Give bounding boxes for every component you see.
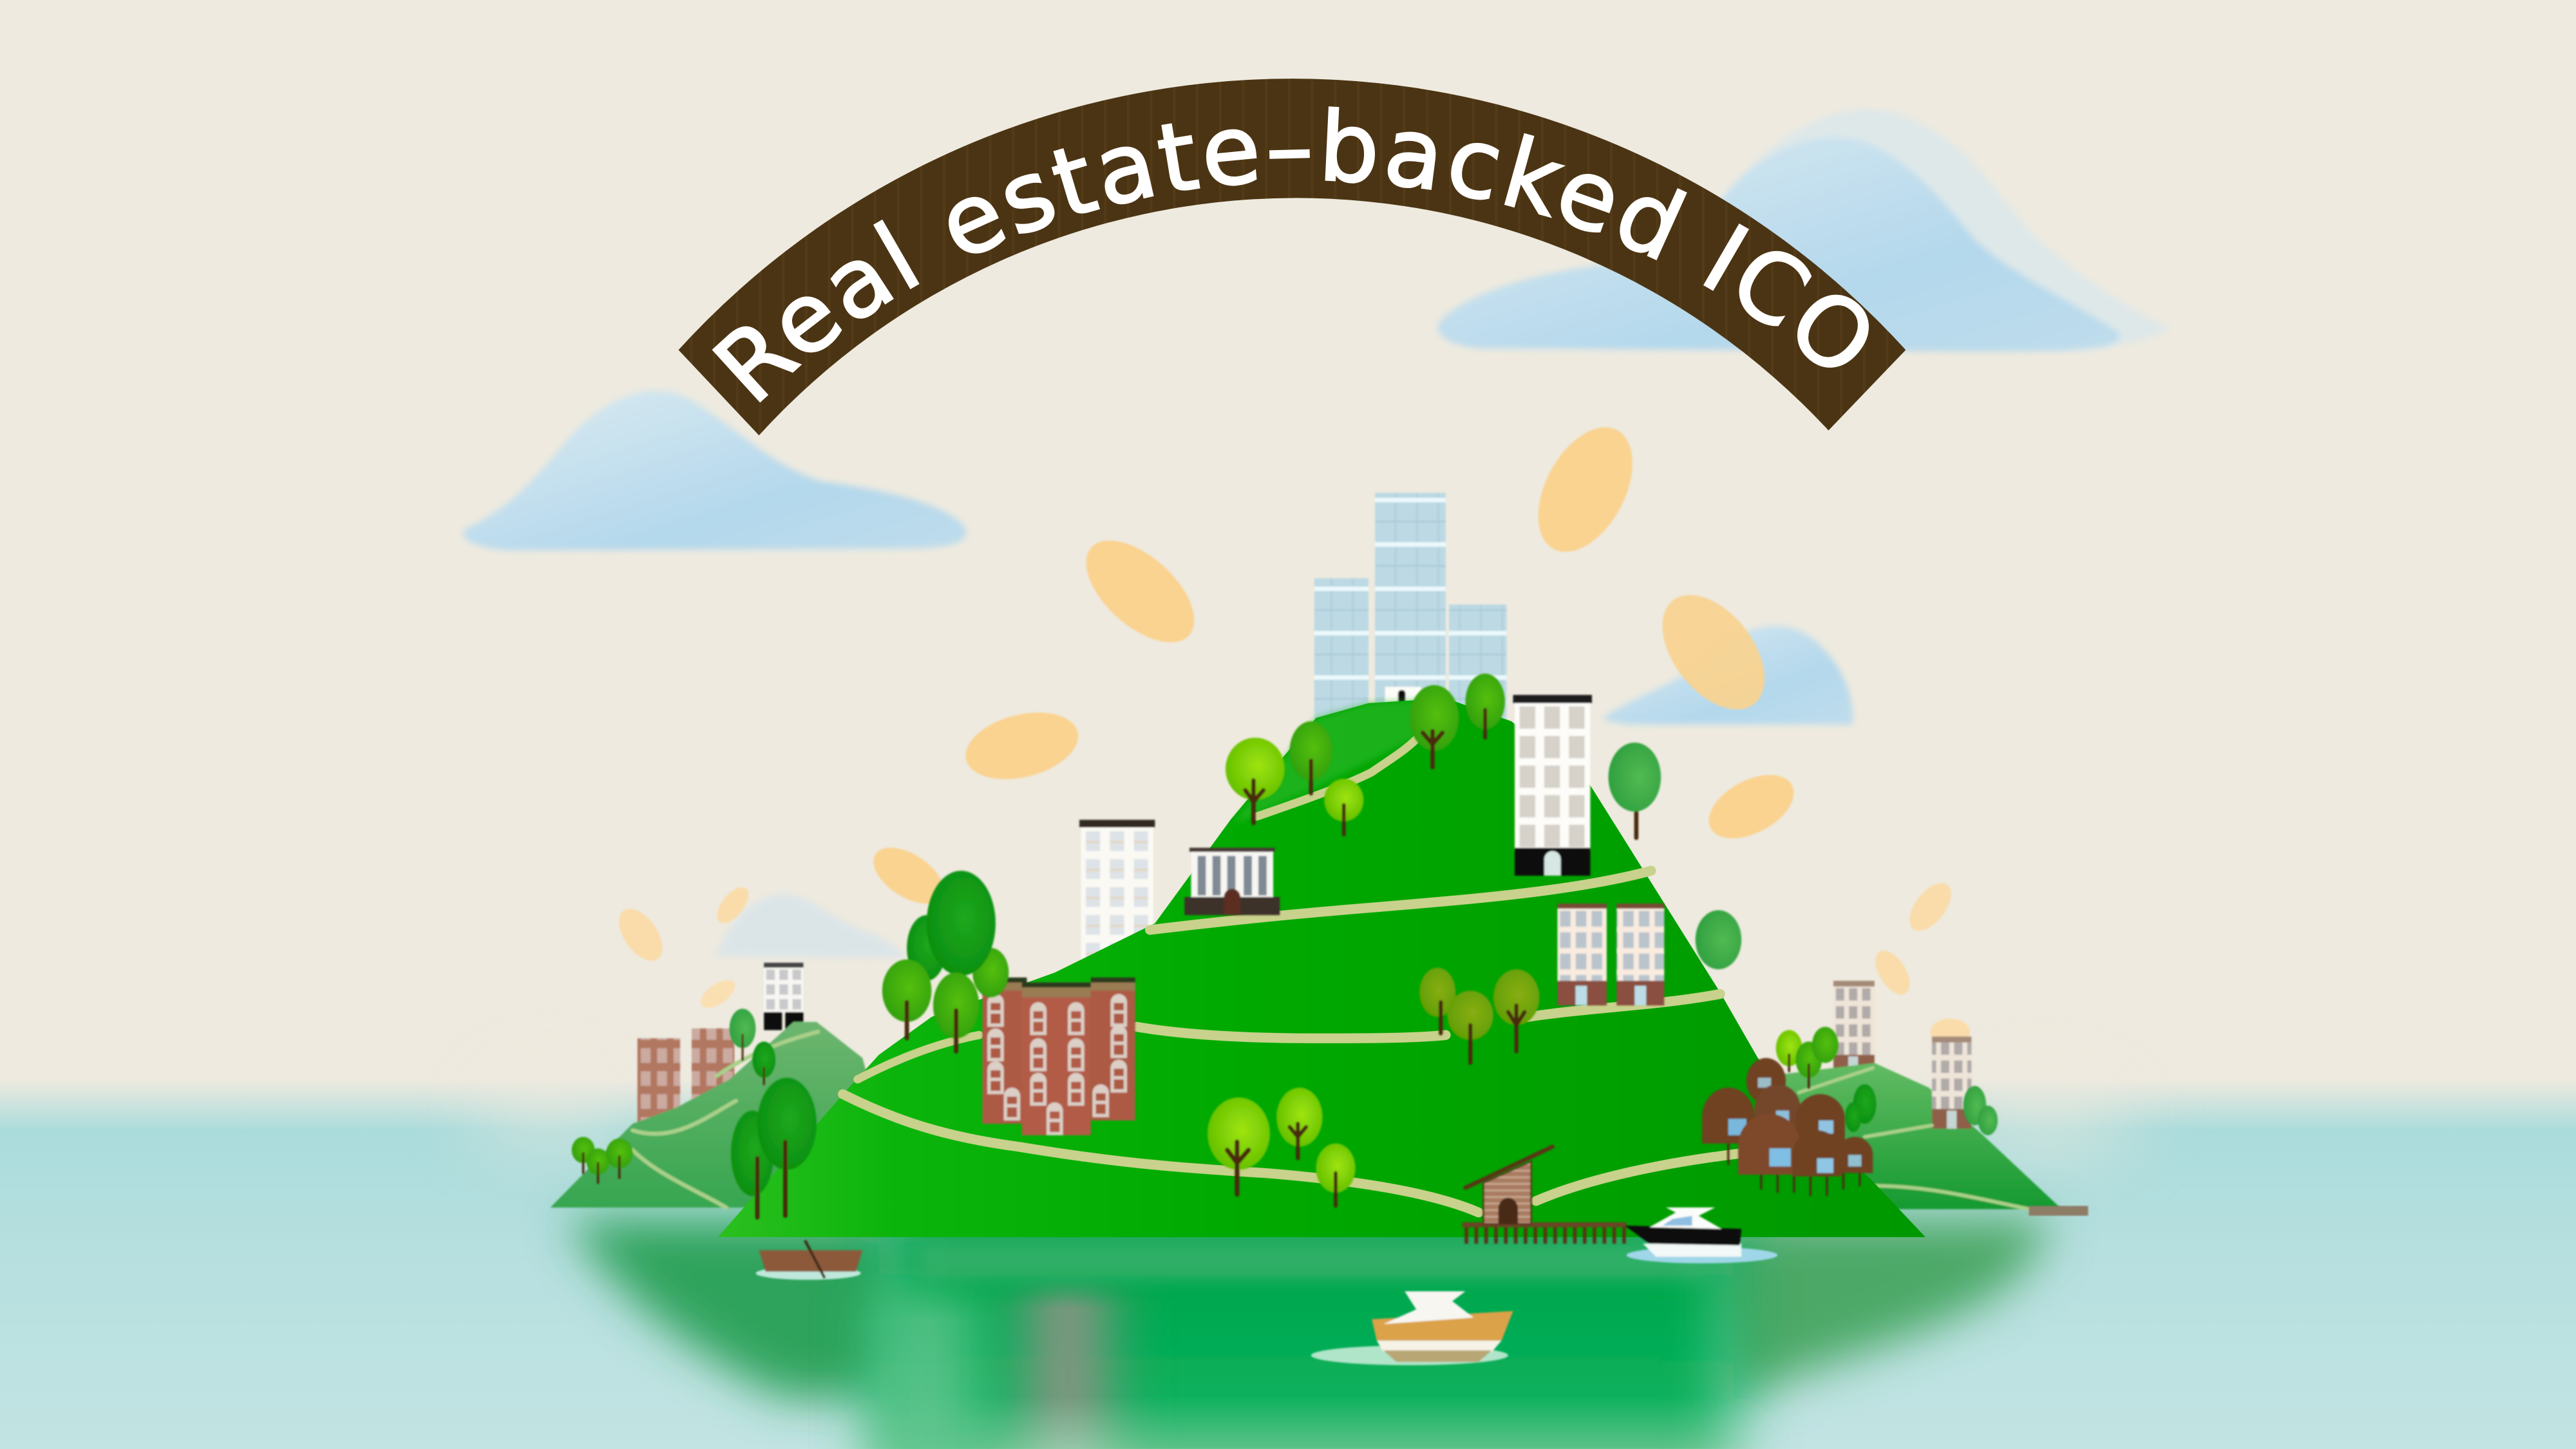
path: bottom right (1536, 1153, 1741, 1201)
clouds (463, 109, 2172, 958)
coin (696, 974, 740, 1013)
tower: right (1449, 605, 1506, 719)
trees: bright lower group (1208, 1088, 1356, 1206)
left small hill (551, 963, 887, 1208)
small dock right (2029, 1206, 2088, 1216)
right building tall (1833, 981, 1875, 1074)
title text: Real estate–backed ICO (712, 106, 1869, 403)
summit lighter area (1232, 698, 1446, 825)
trees: right small hill (1776, 1027, 1998, 1135)
main island (718, 698, 1926, 1237)
cloud: top right (1437, 137, 2119, 352)
brick cornice (983, 978, 1135, 997)
glass towers on the summit (1314, 493, 1506, 734)
hut (1747, 1058, 1786, 1104)
brick windows (987, 994, 1127, 1135)
coin (611, 901, 671, 969)
hut piles (1728, 1142, 1860, 1196)
hill paths (1799, 1068, 2045, 1213)
pier piles (1462, 1224, 1627, 1244)
hill shape (551, 1022, 887, 1208)
trees: olive group (1419, 968, 1539, 1063)
cloud: left (463, 391, 966, 551)
reflection: light streak (879, 1265, 974, 1449)
coin (1902, 876, 1959, 938)
reflection: left lobe (567, 1219, 895, 1399)
coin (1642, 576, 1785, 728)
left white tower (1079, 820, 1155, 969)
colonnade building (1184, 848, 1280, 915)
reflection: brick building (1028, 1273, 1107, 1449)
tower: centre (1375, 493, 1446, 710)
trees: right edge (1608, 743, 1741, 969)
coins (611, 412, 1970, 1045)
banner ribbon (679, 79, 1906, 435)
haze: around island at the horizon (468, 1065, 2136, 1157)
brick wing: centre (1022, 990, 1091, 1135)
hut (1792, 1130, 1842, 1177)
reflection of the island in the water (567, 1219, 2050, 1449)
hut (1738, 1114, 1801, 1175)
coin (1868, 945, 1917, 1000)
mountain paths (843, 739, 1741, 1213)
path: third (1137, 994, 1720, 1038)
boat: motorboat (1311, 1291, 1513, 1365)
small brick building 2 (692, 1028, 734, 1104)
boathouse roof (1466, 1147, 1553, 1188)
brick building (983, 978, 1135, 1135)
haze: left (468, 1065, 632, 1144)
brick wing: left (983, 983, 1027, 1124)
trees on small left hill (572, 1009, 775, 1183)
right building short (1932, 1037, 1971, 1129)
banner: arched title (679, 79, 1906, 435)
path: top (1257, 739, 1416, 817)
reflection: water band below the shore (920, 1240, 1709, 1280)
trees (572, 674, 1998, 1217)
coin (1068, 522, 1212, 661)
white tower building (1513, 695, 1592, 876)
coin (958, 702, 1085, 790)
coin (711, 882, 754, 929)
boathouse (1484, 1162, 1531, 1224)
tree cluster: left of brick building (882, 871, 1009, 1052)
hill paths (632, 1032, 818, 1208)
path: bottom (843, 1094, 1479, 1213)
hill shape (1766, 1063, 2062, 1209)
small brick building (638, 1038, 680, 1133)
reflection: right lobe (1709, 1219, 2050, 1405)
boat: yacht (1625, 1208, 1777, 1264)
path: second (1150, 871, 1651, 930)
cloud: top right back layer (1725, 109, 2172, 352)
island body (718, 698, 1926, 1237)
pier deck (1462, 1222, 1627, 1227)
reflection: main green (879, 1229, 1733, 1449)
boathouse and pier (1462, 1147, 1627, 1244)
boat: rowing boat (755, 1240, 862, 1280)
tower door (1398, 690, 1405, 708)
stilt huts (1702, 1058, 1873, 1196)
path: left upper (858, 1035, 979, 1079)
brick wing: right (1091, 983, 1135, 1121)
coin (1519, 412, 1652, 567)
hut (1837, 1137, 1873, 1173)
hut (1702, 1088, 1754, 1144)
cloud: low left (716, 894, 907, 958)
coin (1698, 762, 1804, 851)
cloud: behind coin (1602, 626, 1853, 724)
boathouse door (1499, 1198, 1518, 1224)
haze: right (1955, 1071, 2136, 1157)
brick roofline (983, 978, 1135, 987)
coin (864, 837, 953, 915)
right small hill (1766, 981, 2062, 1213)
trees: top slope (1226, 674, 1505, 835)
tower: left (1314, 578, 1368, 734)
tree pair: big dark (731, 1077, 817, 1217)
tower lobby (1385, 687, 1421, 710)
hut (1795, 1094, 1845, 1145)
small white building (764, 963, 803, 1030)
twin apartment buildings (1557, 904, 1664, 1005)
coin (1930, 1019, 1970, 1045)
hut (1754, 1084, 1801, 1133)
